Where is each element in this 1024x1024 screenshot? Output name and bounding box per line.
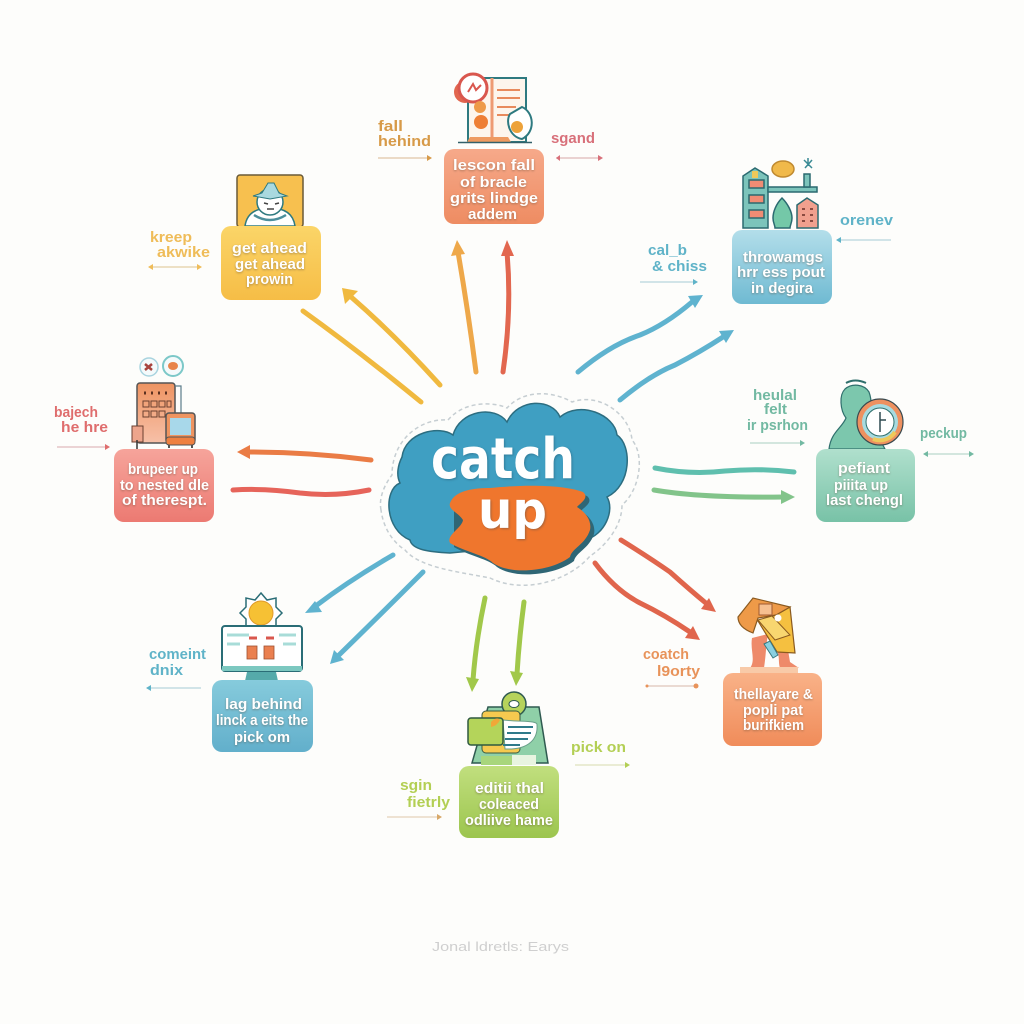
icon: clipboard with documents [468, 692, 548, 765]
card: bottom lime: coleaced [479, 796, 539, 813]
card: lower-left blue: lag behind [225, 696, 302, 713]
card: right blue [732, 230, 832, 304]
label: coatch l9orty: coatch [643, 646, 689, 663]
icon: hand holding pencil [738, 598, 799, 674]
arrow: to red card, orange [237, 445, 371, 460]
card: top orange: addem [468, 206, 517, 223]
card: left red: of therespt. [122, 492, 207, 509]
label: bajech he hre: he hre [61, 419, 108, 436]
label: coatch l9orty [643, 646, 701, 688]
cloud body [389, 403, 627, 553]
label: comeint dnix: comeint [149, 646, 206, 663]
arrow: to blue card, lower [620, 330, 734, 400]
label: kreep akwike [148, 229, 210, 270]
card: right green: last chengl [826, 492, 903, 509]
arrow: to top card, yellow [451, 240, 476, 372]
label: cal_b & chiss: & chiss [652, 258, 707, 275]
card: right blue: in degira [751, 280, 814, 297]
label: fall hehind [378, 118, 432, 161]
dashed cloud outline [380, 394, 639, 585]
orange blob shadow [454, 490, 594, 574]
label: comeint dnix: dnix [150, 662, 184, 679]
arrow: to blue lower-left card, lower [330, 572, 423, 664]
icon: document with shield [454, 74, 532, 142]
card: top orange: of bracle [460, 174, 527, 191]
arrow: to lime card, left [466, 598, 485, 692]
arrow: to orange card, upper [621, 540, 716, 612]
label: pick on [571, 739, 630, 768]
card: lower-right orange: thellayare & [734, 686, 813, 703]
card: left red [114, 449, 214, 522]
label: heulal felt ir psrhon: ir psrhon [747, 417, 808, 434]
label: orenev: orenev [840, 212, 894, 229]
icon: buildings [743, 158, 818, 228]
card: right blue: throwamgs [743, 249, 823, 266]
label: coatch l9orty: l9orty [657, 663, 701, 680]
orange blob [449, 486, 590, 570]
label: sgin fietrly [387, 777, 451, 820]
card: top orange: lescon fall [453, 157, 535, 174]
arrow: to get ahead [342, 288, 440, 385]
card: get ahead: get ahead [235, 256, 305, 273]
card: lower-left blue [212, 680, 313, 752]
card: lower-right orange: burifkiem [743, 717, 804, 734]
arrow: to blue lower-left card, upper [305, 555, 393, 613]
label: peckup [920, 425, 974, 457]
icon: person with clock [829, 380, 903, 449]
card: top orange [444, 149, 544, 224]
label: cal_b & chiss: cal_b [648, 242, 687, 259]
card: right green: piiita up [834, 477, 888, 494]
arrow: to green card [654, 490, 795, 504]
card: lower-right orange: popli pat [743, 702, 803, 719]
label: fall hehind: fall [378, 118, 403, 135]
label: comeint dnix [146, 646, 206, 691]
word: catch: catch [431, 427, 575, 492]
icon: person in yellow frame [237, 175, 303, 227]
label: heulal felt ir psrhon: felt [764, 401, 787, 418]
label: kreep akwike: akwike [157, 244, 210, 261]
card: top orange: grits lindge [450, 190, 538, 207]
arrow: to blue card, upper [578, 295, 703, 372]
arrow: to red card, plain stroke [233, 489, 369, 494]
label: kreep akwike: kreep [150, 229, 192, 246]
label: sgand: sgand [551, 130, 595, 147]
card: get ahead: prowin [246, 271, 293, 288]
card: get ahead: get ahead [232, 240, 307, 257]
label: heulal felt ir psrhon [747, 387, 808, 446]
card: bottom lime [459, 766, 559, 838]
card: bottom lime: odliive hame [465, 812, 553, 829]
label: heulal felt ir psrhon: heulal [753, 387, 797, 404]
card: left red: to nested dle [120, 477, 209, 494]
card: right blue: hrr ess pout [737, 264, 825, 281]
card: lower-left blue: linck a eits the [216, 712, 308, 729]
card: right green: pefiant [838, 460, 890, 477]
label: cal_b & chiss [640, 242, 707, 285]
label: bajech he hre [54, 404, 110, 450]
arrow: to green card, teal stroke [655, 468, 794, 472]
card: right green [816, 449, 915, 522]
footer caption: Jonal ldretls: Earys [432, 939, 570, 954]
label: bajech he hre: bajech [54, 404, 98, 421]
card: get ahead [221, 226, 321, 300]
word: up: up [478, 481, 547, 541]
label: peckup: peckup [920, 425, 967, 442]
card: bottom lime: editii thal [475, 780, 544, 797]
label: sgand [551, 130, 603, 161]
arrow: to orange card, lower [595, 563, 700, 640]
label: sgin fietrly: sgin [400, 777, 432, 794]
card: left red: brupeer up [128, 461, 198, 478]
label: pick on: pick on [571, 739, 626, 756]
icon: monitor with sun [222, 593, 302, 681]
card: lower-left blue: pick om [234, 729, 290, 746]
central cloud: catch up [380, 394, 639, 585]
label: orenev [836, 212, 894, 243]
card: lower-right orange [723, 673, 822, 746]
label: fall hehind: hehind [378, 133, 431, 150]
arrow: to lime card, right [510, 602, 524, 686]
label: sgin fietrly: fietrly [407, 794, 451, 811]
arrow: to top card, red [501, 240, 514, 372]
icon: office building and seat [132, 356, 195, 451]
arrow: to get ahead, plain stroke [303, 311, 421, 402]
